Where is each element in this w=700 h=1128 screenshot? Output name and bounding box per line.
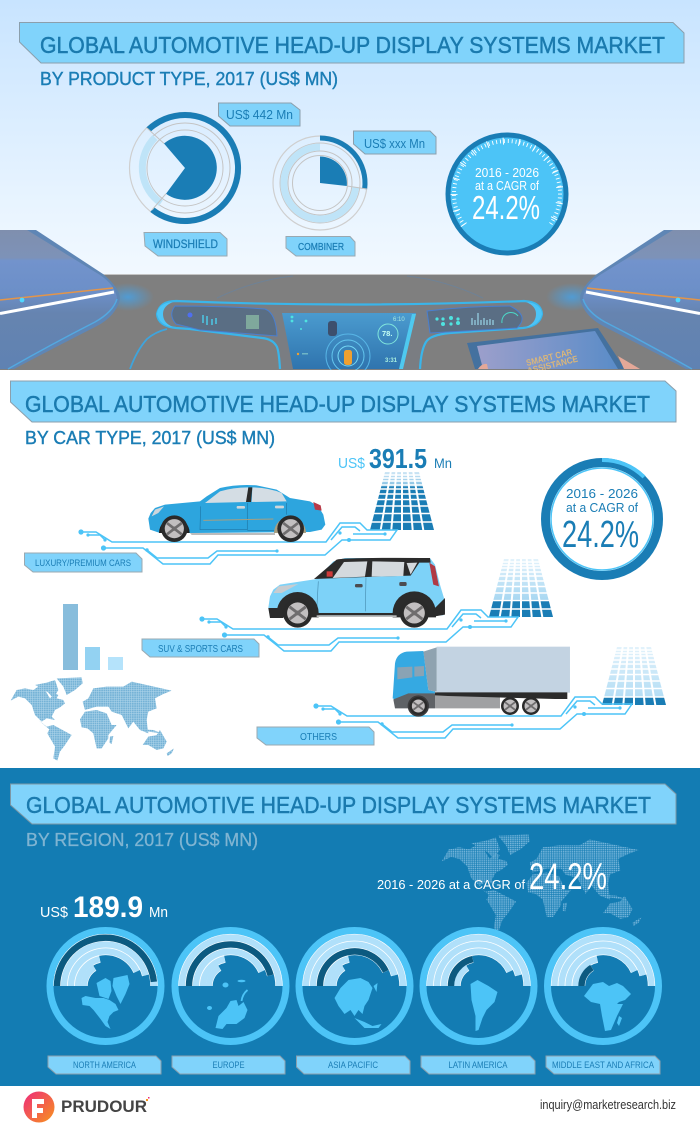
illustration: car dashboard: 3:31 [385, 358, 398, 364]
label: windshield: WINDSHIELD [153, 237, 218, 251]
region dial: Europe [175, 930, 286, 1042]
icon: SUV [268, 558, 445, 628]
circuit lines: SUV [199, 610, 518, 651]
perspective bar: others [602, 647, 666, 705]
illustration: car dashboard: 6:10 [393, 317, 405, 323]
gauge: CAGR 24.2%: at a CAGR of [475, 179, 539, 193]
region dial: Middle East and Africa [548, 930, 658, 1042]
illustration: car dashboard: SMART CAR [525, 347, 574, 368]
perspective bar: luxury [370, 472, 434, 530]
label: others: OTHERS [300, 732, 337, 743]
icon: truck [393, 647, 570, 717]
callout: US$ 442 Mn: US$ 442 Mn [226, 107, 293, 122]
footer logo: Prudour [24, 1092, 150, 1122]
background: sky gradient [0, 0, 700, 370]
heading banner: car type [10, 381, 676, 422]
label: Europe: EUROPE [212, 1060, 244, 1071]
callout: US$ xxx Mn: US$ xxx Mn [364, 136, 425, 151]
callout: US$ xxx Mn [354, 131, 436, 154]
subheading: by region: BY REGION, 2017 (US$ MN) [26, 829, 258, 850]
label: Latin America: LATIN AMERICA [448, 1060, 508, 1071]
label: North America: NORTH AMERICA [73, 1060, 137, 1071]
heading banner: product type [20, 22, 684, 63]
subheading: by product type: BY PRODUCT TYPE, 2017 (US$ MN) [40, 68, 338, 89]
label: windshield [144, 232, 227, 256]
label: SUV and sports cars: SUV & SPORTS CARS [158, 644, 243, 655]
heading banner: region [10, 784, 676, 824]
label: Asia Pacific [296, 1056, 410, 1074]
gauge: CAGR 24.2% [448, 135, 566, 253]
gauge: CAGR ring: 24.2% [562, 514, 639, 556]
region dial: Latin America [423, 930, 534, 1042]
CAGR statement: 24.2% [529, 856, 607, 897]
illustration: car dashboard [0, 230, 700, 378]
illustration: car dashboard: 78. [382, 329, 392, 338]
panel: by region [0, 768, 700, 1086]
value: US$ 391.5 Mn: 391.5 [369, 443, 427, 474]
region dial: North America [50, 930, 161, 1042]
heading banner: car type: GLOBAL AUTOMOTIVE HEAD-UP DISPLAY SYSTEMS MARKET [25, 391, 650, 417]
perspective bar: SUV [489, 559, 553, 617]
circuit lines: others [313, 697, 632, 738]
donut chart: windshield [130, 112, 240, 224]
world map: dotted [11, 677, 174, 761]
label: Middle East and Africa [546, 1056, 660, 1074]
value: US$ 391.5 Mn: US$ [338, 455, 366, 472]
panel: by car type [0, 370, 700, 768]
CAGR statement [377, 856, 607, 897]
region dial: Asia Pacific [299, 930, 410, 1042]
value: US$ 391.5 Mn [338, 443, 452, 474]
label: Middle East and Africa: MIDDLE EAST AND AFRICA [552, 1060, 655, 1071]
label: Asia Pacific: ASIA PACIFIC [328, 1060, 378, 1071]
label: combiner: COMBINER [298, 241, 344, 253]
value: US$ 189.9 Mn: US$ [40, 904, 69, 921]
label: luxury premium cars: LUXURY/PREMIUM CARS [35, 558, 131, 569]
label: Europe [172, 1056, 285, 1074]
label: North America [48, 1056, 161, 1074]
gauge: CAGR ring [546, 460, 658, 576]
label: Latin America [421, 1056, 535, 1074]
gauge: CAGR ring: at a CAGR of [566, 500, 638, 515]
gauge: CAGR 24.2%: 2016 - 2026 [475, 166, 539, 180]
panel: by product type [20, 22, 684, 256]
label: others [257, 727, 374, 745]
label: luxury premium cars [24, 553, 142, 572]
footer logo: Prudour: PRUDOUR [61, 1097, 147, 1116]
value: US$ 189.9 Mn: 189.9 [73, 891, 143, 924]
CAGR statement: 2016 - 2026 at a CAGR of [377, 877, 525, 892]
gauge: CAGR ring: 2016 - 2026 [566, 486, 638, 501]
contact email: inquiry@marketresearch.biz [540, 1098, 676, 1112]
callout: US$ 442 Mn [218, 103, 300, 126]
gauge: CAGR 24.2%: 24.2% [472, 189, 540, 226]
bar chart: decorative bars [63, 604, 123, 670]
value: US$ 189.9 Mn [40, 891, 168, 924]
heading banner: region: GLOBAL AUTOMOTIVE HEAD-UP DISPLAY SYSTEMS MARKET [26, 792, 651, 818]
donut chart: combiner [273, 136, 367, 230]
label: SUV and sports cars [142, 639, 259, 657]
label: combiner [286, 236, 355, 256]
value: US$ 189.9 Mn: Mn [149, 904, 168, 921]
icon: sedan [148, 485, 325, 542]
circuit lines: luxury [78, 523, 397, 564]
illustration: car dashboard: ASSISTANCE [526, 354, 579, 376]
value: US$ 391.5 Mn: Mn [434, 455, 452, 471]
world map: dotted background [442, 835, 641, 931]
subheading: by car type: BY CAR TYPE, 2017 (US$ MN) [25, 427, 275, 448]
